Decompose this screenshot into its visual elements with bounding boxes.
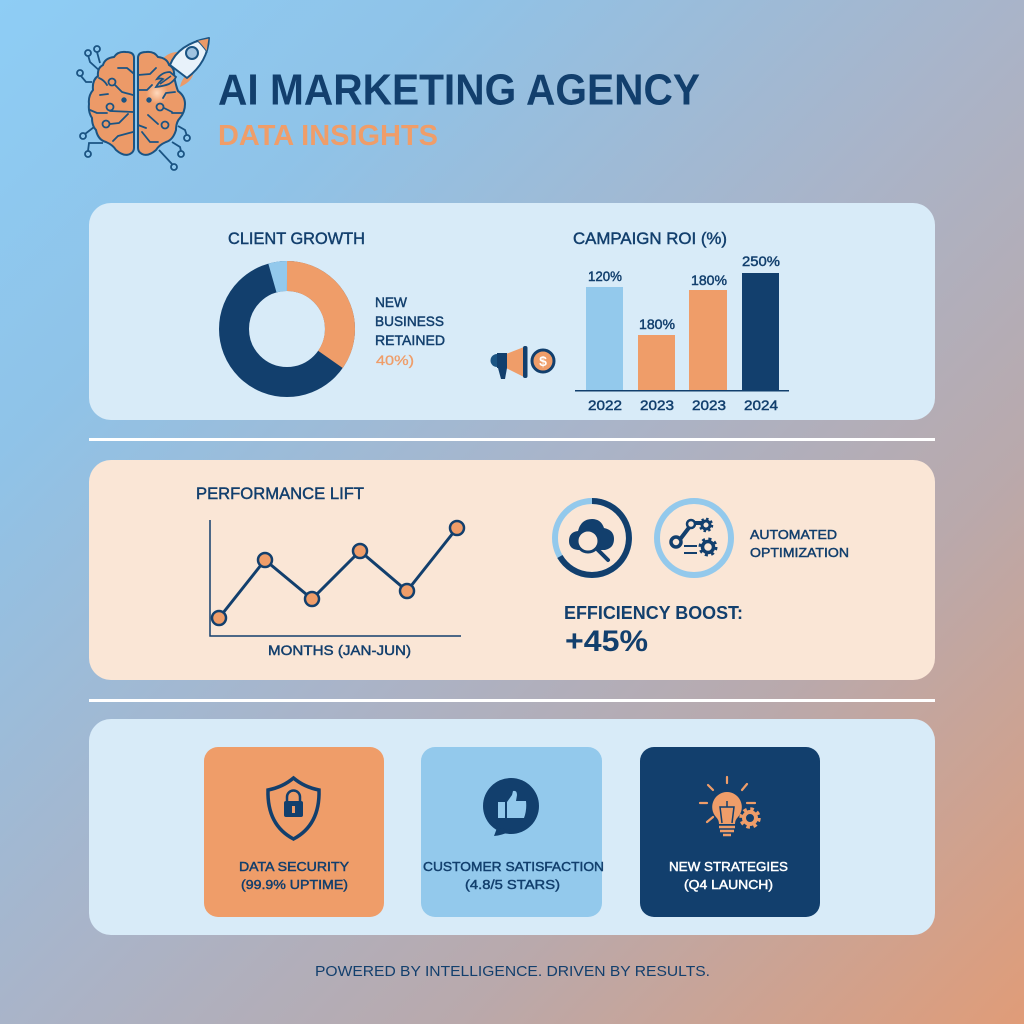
heading: campaign ROI: CAMPAIGN ROI (%) (573, 229, 727, 248)
bar chart (575, 253, 789, 413)
stat: efficiency boost: EFFICIENCY BOOST: (564, 603, 743, 623)
label: automated optimization (750, 527, 849, 560)
subtitle: DATA INSIGHTS (218, 120, 438, 152)
donut chart (234, 276, 340, 382)
icon: shield with lock (268, 778, 319, 839)
bar chart: 180% (691, 272, 727, 288)
card: data security (204, 747, 384, 917)
footer tagline: POWERED BY INTELLIGENCE. DRIVEN BY RESULTS. (315, 963, 710, 980)
rocket fins behind (160, 52, 193, 87)
icon: cloud search ring (555, 501, 629, 575)
icon: automation arm ring (657, 501, 731, 575)
heading: performance lift: PERFORMANCE LIFT (196, 484, 364, 503)
donut legend (375, 294, 445, 368)
heading: client growth: CLIENT GROWTH (228, 229, 365, 248)
icon: light bulb with gear (700, 777, 759, 835)
card: customer satisfaction (421, 747, 604, 917)
bar chart: 2022 (588, 397, 622, 413)
label: automated optimization: AUTOMATED (750, 527, 837, 542)
donut legend: BUSINESS (375, 313, 444, 329)
panel: client growth and campaign ROI (89, 203, 935, 420)
bar chart: 2023 (640, 397, 674, 413)
line chart (210, 520, 464, 636)
donut legend: 40%) (376, 352, 414, 368)
icon: AI brain with rocket (77, 38, 209, 170)
card: customer satisfaction: CUSTOMER SATISFACTION (423, 859, 604, 874)
label: automated optimization: OPTIMIZATION (750, 545, 849, 560)
title: AI MARKETING AGENCY (218, 66, 700, 114)
card: data security: (99.9% UPTIME) (241, 877, 348, 892)
stat: efficiency boost: +45% (565, 625, 648, 658)
brain hemispheres (89, 52, 185, 155)
rocket (156, 38, 209, 87)
brain circuit lines (77, 46, 190, 170)
icon: megaphone with dollar: $ (539, 353, 547, 369)
panel: highlight cards (89, 719, 935, 935)
bar chart: 180% (639, 316, 675, 332)
bar chart: 250% (742, 253, 780, 269)
card: new strategies: NEW STRATEGIES (669, 859, 788, 874)
brain folds (90, 68, 182, 142)
donut legend: RETAINED (375, 332, 445, 348)
brain glow (146, 82, 168, 104)
bar chart: 120% (588, 268, 622, 284)
icon: thumbs up bubble (483, 778, 539, 836)
bar chart: 2023 (692, 397, 726, 413)
card: data security: DATA SECURITY (239, 859, 349, 874)
panel: performance lift and efficiency (89, 460, 935, 680)
card: new strategies (640, 747, 820, 917)
axis label: MONTHS (JAN-JUN) (268, 642, 411, 658)
icon: megaphone with dollar (490, 346, 554, 379)
card: customer satisfaction: (4.8/5 STARS) (465, 877, 560, 892)
donut legend: NEW (375, 294, 408, 310)
stat: efficiency boost (564, 603, 743, 658)
card: new strategies: (Q4 LAUNCH) (684, 877, 773, 892)
bar chart: 2024 (744, 397, 778, 413)
